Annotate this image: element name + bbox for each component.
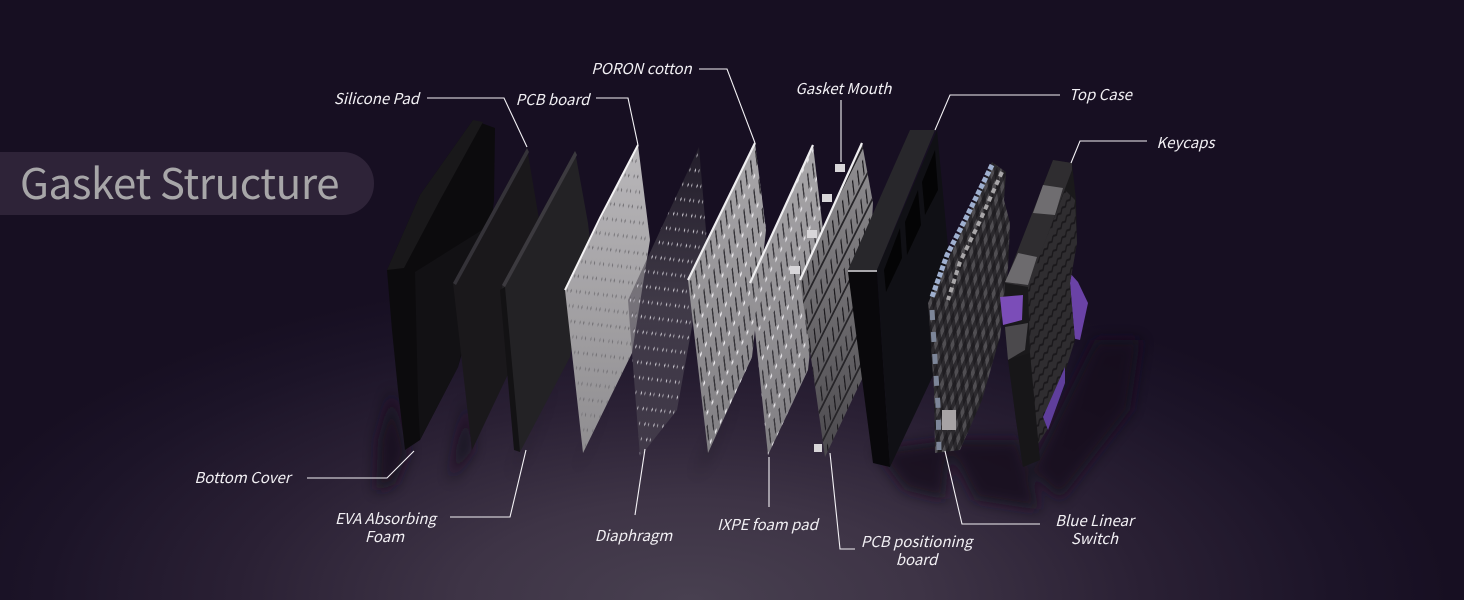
label: PORON cotton: PORON cotton [591, 58, 693, 79]
panel: PORON cotton [688, 143, 766, 453]
label: PORON cotton [591, 58, 755, 143]
panel: diaphragm [628, 147, 707, 457]
panel: PCB board [565, 145, 650, 453]
panel: silicone pad [453, 148, 540, 450]
label: IXPE foam pad [717, 457, 820, 535]
panel: EVA absorbing foam [500, 151, 590, 452]
label: EVA Absorbing Foam [335, 450, 526, 547]
panel: bottom cover [387, 120, 495, 450]
panel: keycaps [1000, 160, 1088, 467]
label: Silicone Pad: Silicone Pad [334, 88, 421, 109]
label: Gasket Mouth: Gasket Mouth [795, 78, 892, 99]
label: PCB positioning board [830, 453, 975, 570]
title pill [0, 151, 374, 215]
label: PCB board [516, 89, 638, 145]
label: IXPE foam pad: IXPE foam pad [717, 514, 820, 535]
label: Blue Linear Switch: Blue Linear [1055, 510, 1136, 531]
icon: gasket mouth pieces [790, 164, 845, 452]
label: Blue Linear Switch [945, 451, 1136, 549]
label: PCB positioning board: PCB positioning [861, 531, 975, 552]
label: Bottom Cover [194, 451, 414, 488]
label: PCB positioning board: board [896, 549, 939, 570]
label: Diaphragm: Diaphragm [595, 525, 673, 546]
floor shadows [376, 340, 1140, 510]
panel: blue linear switches [928, 162, 1010, 453]
panel: PCB positioning board [800, 143, 873, 457]
label: Diaphragm [595, 449, 673, 546]
label: EVA Absorbing Foam: Foam [365, 526, 405, 547]
label: Silicone Pad [334, 88, 527, 147]
label: EVA Absorbing Foam: EVA Absorbing [335, 508, 439, 529]
label: Keycaps: Keycaps [1157, 132, 1216, 153]
heading: Gasket Structure [20, 151, 339, 212]
label: Bottom Cover: Bottom Cover [194, 467, 293, 488]
panel: top case [848, 130, 953, 467]
label: Blue Linear Switch: Switch [1071, 528, 1119, 549]
label: Keycaps [1071, 132, 1216, 163]
label: Top Case [935, 84, 1134, 130]
label: Gasket Mouth [795, 78, 892, 162]
panel: IXPE foam pad [750, 145, 823, 455]
label: Top Case: Top Case [1069, 84, 1134, 105]
label: PCB board: PCB board [516, 89, 591, 110]
